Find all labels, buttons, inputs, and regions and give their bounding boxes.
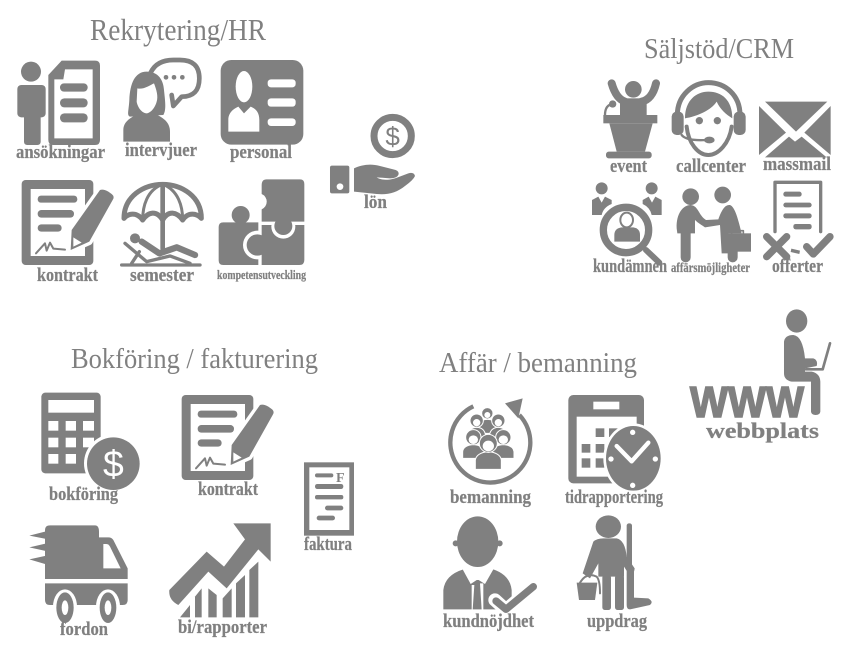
heading: Säljstöd/CRM: Säljstöd/CRM (644, 34, 794, 65)
icon: kundämnen (592, 182, 662, 263)
icon: personal (221, 60, 303, 145)
icon: kompetensutveckling (219, 179, 304, 265)
icon: offerter (767, 182, 830, 257)
icon: fordon (29, 525, 128, 624)
text: WWW: WWW (690, 378, 804, 427)
icon: ansökningar (17, 61, 100, 145)
icon: bokföring: $ (103, 443, 124, 485)
icon: event (603, 81, 657, 158)
label: bokföring: bokföring (49, 484, 118, 505)
panel: Säljstöd/CRM (592, 34, 831, 277)
icon: kontrakt (22, 180, 114, 265)
icon: uppdrag (577, 515, 652, 610)
icon: faktura (304, 462, 354, 536)
icon: faktura: F (336, 471, 345, 486)
icon: kontrakt (182, 395, 274, 480)
label: kundnöjdhet: kundnöjdhet (443, 611, 535, 632)
icon: bemanning (450, 398, 530, 483)
label: uppdrag: uppdrag (587, 611, 647, 632)
label: affärsmöjligheter: affärsmöjligheter (671, 261, 750, 276)
label: fordon: fordon (60, 619, 108, 640)
label: massmail: massmail (763, 154, 831, 175)
icon: lön (hand with coin) (330, 117, 415, 194)
label: intervjuer: intervjuer (125, 140, 197, 161)
panel: Rekrytering/HR (16, 12, 306, 286)
label: ansökningar: ansökningar (16, 142, 105, 163)
label: tidrapportering: tidrapportering (565, 487, 663, 508)
label: bemanning: bemanning (450, 487, 531, 508)
label: personal: personal (230, 142, 292, 163)
label: lön: lön (364, 192, 387, 213)
label: semester: semester (130, 265, 195, 286)
heading: Bokföring / fakturering: Bokföring / fakturering (71, 344, 318, 375)
icon: lön (hand with coin): $ (385, 121, 400, 151)
label: kontrakt: kontrakt (198, 479, 259, 500)
label: event: event (610, 156, 648, 177)
label: kompetensutveckling: kompetensutveckling (217, 267, 306, 282)
heading: Affär / bemanning: Affär / bemanning (439, 348, 637, 379)
icon: semester (122, 184, 201, 265)
label: faktura: faktura (304, 534, 352, 555)
label: bi/rapporter: bi/rapporter (178, 617, 267, 638)
icon: kundnöjdhet (443, 516, 533, 610)
icon: tidrapportering (568, 395, 663, 493)
label: kontrakt: kontrakt (37, 265, 99, 286)
icon: sitting person with laptop (784, 309, 830, 415)
label: callcenter: callcenter (676, 156, 746, 177)
icon: bi/rapporter (chart with arrow) (169, 523, 271, 617)
label: webbplats: webbplats (706, 418, 820, 443)
icon: callcenter (672, 83, 746, 155)
panel: Bokföring / fakturering (29, 344, 354, 640)
icon: massmail (759, 102, 831, 157)
icon: intervjuer (123, 60, 199, 142)
icon: bokföring (41, 393, 143, 493)
panel: Affär / bemanning (439, 348, 663, 632)
label: kundämnen: kundämnen (593, 256, 667, 277)
icon: affärsmöjligheter (677, 187, 751, 257)
label: offerter: offerter (772, 256, 823, 277)
heading: Rekrytering/HR: Rekrytering/HR (90, 12, 266, 47)
icon: webbplats person with WWW (690, 309, 830, 427)
